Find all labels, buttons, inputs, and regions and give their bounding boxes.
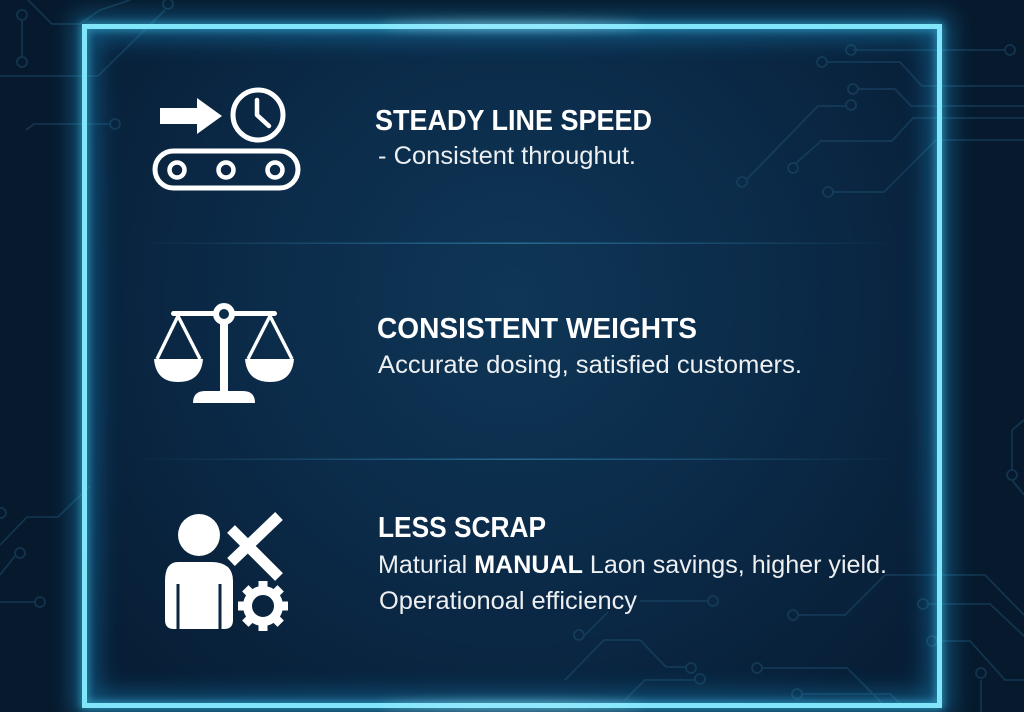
- heading: less scrap: LESS SCRAP: [378, 512, 546, 544]
- text block: steady line speed: [375, 105, 652, 170]
- description: steady line speed: - Consistent throughut.: [378, 142, 636, 170]
- description: consistent weights: Accurate dosing, satisfied customers.: [378, 351, 802, 379]
- icon: conveyor with clock: [155, 90, 298, 188]
- heading: consistent weights: CONSISTENT WEIGHTS: [377, 313, 697, 345]
- icon: operator, cross and gear: [165, 514, 288, 631]
- panel fill: [84, 26, 940, 706]
- text block: less scrap: [378, 512, 887, 615]
- icon: balance scale: [154, 306, 294, 403]
- text block: consistent weights: [377, 313, 802, 379]
- heading: steady line speed: STEADY LINE SPEED: [375, 105, 652, 137]
- description line 1: less scrap: Maturial MANUAL Laon savings, higher yield.: [378, 551, 887, 579]
- description line 2: less scrap: Operationoal efficiency: [379, 587, 638, 615]
- divider 2: [130, 458, 900, 460]
- divider 1: [130, 242, 900, 244]
